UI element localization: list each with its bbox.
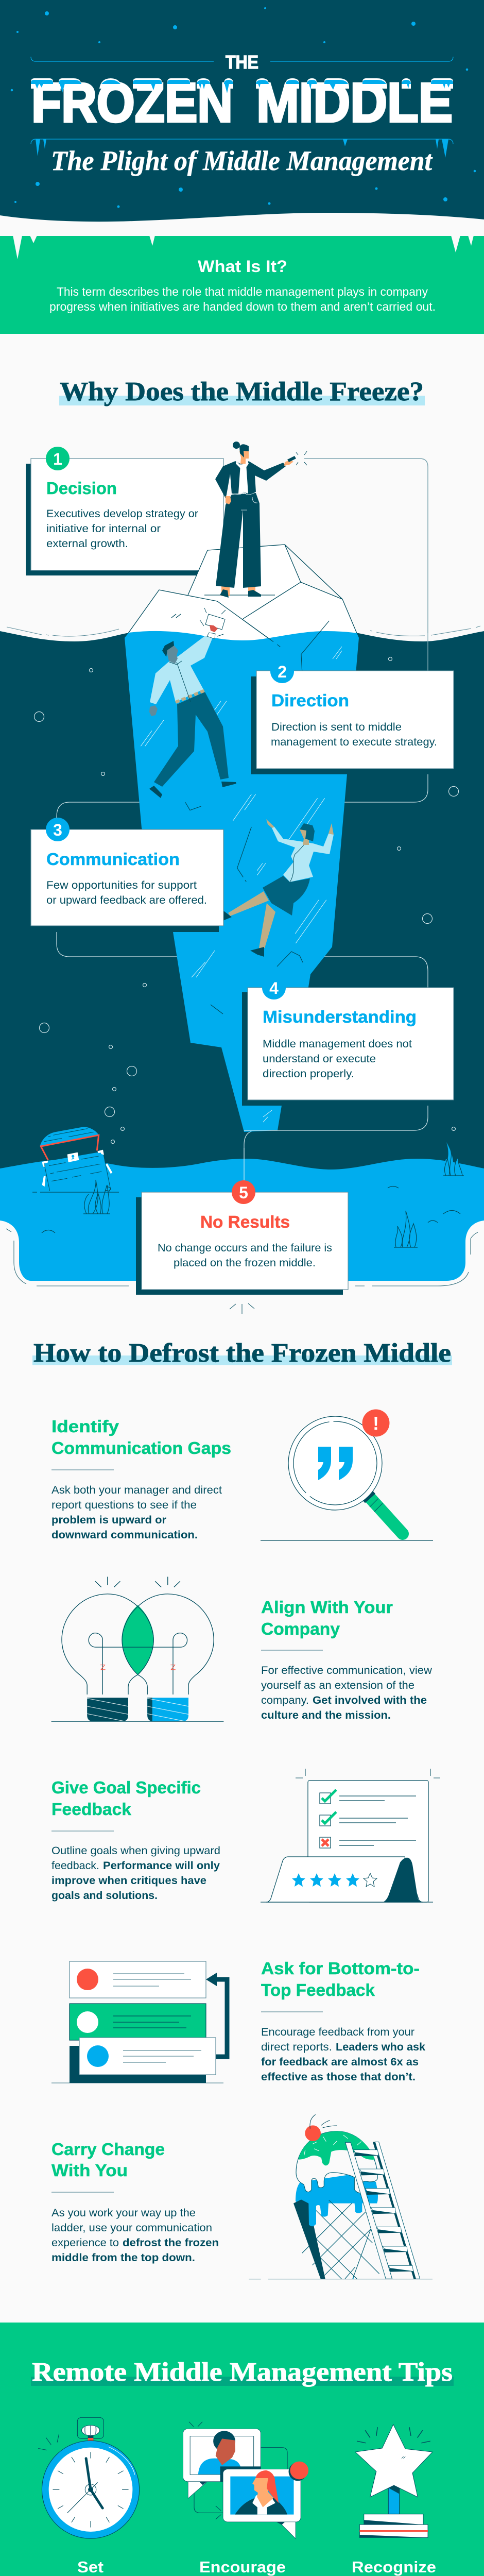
connector: decision to direction xyxy=(304,459,428,671)
tip: give goal specific feedback: Performance will only xyxy=(103,1860,220,1872)
tip: align with your company: Align With Your xyxy=(261,1598,393,1617)
card: communication: 3 xyxy=(53,821,62,839)
tip: carry change with you: As you work your way up the xyxy=(51,2207,196,2219)
card: no results: No Results xyxy=(200,1212,290,1231)
card: decision xyxy=(26,447,223,575)
title: subtitle: The Plight of Middle Management xyxy=(51,145,433,176)
tip: carry change with you: middle from the top down. xyxy=(51,2252,195,2264)
card: misunderstanding: 4 xyxy=(269,979,279,997)
heading: how to defrost: How to Defrost the Frozen Middle xyxy=(33,1338,451,1368)
tip: give goal specific feedback: improve when critiques have xyxy=(51,1875,206,1887)
tip: identify communication gaps: Ask both your manager and direct xyxy=(51,1484,222,1496)
tip: carry change with you: defrost the frozen xyxy=(123,2237,219,2249)
icon: stopwatch xyxy=(38,2417,140,2538)
tip: align with your company: yourself as an extension of the xyxy=(261,1680,414,1691)
text: recognize employees: Recognize xyxy=(352,2558,436,2576)
icon: star trophy xyxy=(355,2425,433,2537)
panel: what is it xyxy=(0,213,484,334)
tip: align with your company: culture and the mission. xyxy=(261,1709,391,1721)
underwater iceberg xyxy=(125,631,359,1132)
card: misunderstanding: Middle management does not xyxy=(263,1038,412,1050)
tip: align with your company: company. xyxy=(261,1694,309,1706)
card: decision: 1 xyxy=(53,450,62,468)
tip: align with your company: Get involved with the xyxy=(313,1694,427,1706)
card: decision: Executives develop strategy or xyxy=(46,508,198,520)
tip: align with your company: Company xyxy=(261,1619,340,1638)
panel: remote middle management tips xyxy=(0,2323,484,2576)
tip: ask for bottom-to-top feedback: direct reports. xyxy=(261,2041,332,2053)
tip: identify communication gaps: report questions to see if the xyxy=(51,1499,197,1511)
tip: identify communication gaps xyxy=(51,1417,231,1541)
card: direction: 2 xyxy=(278,663,287,681)
panel: iceberg scene xyxy=(0,442,484,1314)
card: misunderstanding: understand or execute xyxy=(263,1053,376,1065)
tip: carry change with you: experience to xyxy=(51,2237,119,2249)
connectors between cards xyxy=(57,774,428,1181)
icon: feedback checklist xyxy=(261,1769,440,1902)
card: direction xyxy=(251,659,454,774)
tip: ask for bottom-to-top feedback xyxy=(261,1959,425,2083)
heading: what is it: What Is It? xyxy=(198,257,287,276)
card: decision: external growth. xyxy=(46,538,128,550)
card: misunderstanding xyxy=(242,976,454,1106)
tip: ask for bottom-to-top feedback: Ask for Bottom-to- xyxy=(261,1959,420,1978)
tip: carry change with you: ladder, use your communication xyxy=(51,2222,212,2234)
bubbles xyxy=(34,657,458,1144)
tip: identify communication gaps: downward communication. xyxy=(51,1529,198,1541)
card: direction: Direction xyxy=(271,691,349,710)
text: definition: This term describes the role that middle management plays in company xyxy=(57,285,428,298)
text: set timed goals: Set xyxy=(77,2558,103,2576)
iceberg above water xyxy=(128,545,357,649)
tip: give goal specific feedback: Outline goals when giving upward xyxy=(51,1845,220,1857)
tip: give goal specific feedback: Give Goal Specific xyxy=(51,1778,201,1797)
title: frozen middle xyxy=(31,71,453,133)
tip: identify communication gaps: Identify xyxy=(51,1417,119,1436)
panel: header xyxy=(0,0,484,227)
tip: ask for bottom-to-top feedback: effective as those that don’t. xyxy=(261,2071,416,2083)
card: decision: initiative for internal or xyxy=(46,523,161,535)
heading: why does the middle freeze: Why Does the Middle Freeze? xyxy=(60,377,424,406)
figure: executive on iceberg xyxy=(204,442,307,598)
icon: feedback stack xyxy=(51,1961,227,2083)
card: no results: 5 xyxy=(239,1183,248,1202)
card: direction: management to execute strategy. xyxy=(271,736,437,748)
card: misunderstanding: direction properly. xyxy=(263,1068,354,1080)
shoreline lines xyxy=(6,1229,478,1286)
card: communication xyxy=(26,818,223,932)
icon: treasure chest xyxy=(40,1127,112,1191)
text: definition xyxy=(49,285,436,313)
card: misunderstanding: Misunderstanding xyxy=(263,1007,417,1026)
title: frozen middle: FROZEN xyxy=(31,71,233,133)
heading: remote tips: Remote Middle Management Tips xyxy=(32,2358,453,2387)
seaweed xyxy=(42,1142,464,1247)
icon: overlapping light bulbs xyxy=(51,1577,223,1721)
title: frozen middle: MIDDLE xyxy=(256,71,453,133)
tip: carry change with you: With You xyxy=(51,2161,128,2180)
tip: align with your company xyxy=(261,1598,433,1721)
tip: give goal specific feedback: feedback. xyxy=(51,1860,99,1872)
card: no results xyxy=(136,1180,348,1295)
icon: magnifying glass xyxy=(261,1410,433,1540)
card: no results: placed on the frozen middle. xyxy=(174,1257,316,1269)
sea floor xyxy=(0,1159,484,1281)
tip: give goal specific feedback: goals and solutions. xyxy=(51,1890,158,1902)
tip: ask for bottom-to-top feedback: Leaders who ask xyxy=(336,2041,425,2053)
icon: video chat xyxy=(183,2422,308,2538)
tip: identify communication gaps: problem is upward or xyxy=(51,1514,166,1526)
card: communication: Communication xyxy=(46,850,180,869)
tip: ask for bottom-to-top feedback: for feedback are almost 6x as xyxy=(261,2056,419,2068)
icon: ice cream and ladder xyxy=(249,2114,433,2279)
tip: ask for bottom-to-top feedback: Encourage feedback from your xyxy=(261,2026,414,2038)
card: decision: Decision xyxy=(46,479,117,498)
text: encourage communication: Encourage xyxy=(199,2558,286,2576)
card: no results: No change occurs and the failure is xyxy=(158,1242,332,1254)
text: definition: progress when initiatives are handed down to them and aren’t carried out. xyxy=(49,300,436,313)
figure: man falling xyxy=(149,608,236,798)
tip: ask for bottom-to-top feedback: Top Feedback xyxy=(261,1980,375,1999)
card: communication: Few opportunities for support xyxy=(46,879,197,891)
ice cracks and glints xyxy=(141,701,326,943)
tip: carry change with you xyxy=(51,2140,219,2264)
card: direction: Direction is sent to middle xyxy=(271,721,402,733)
tip: give goal specific feedback xyxy=(51,1778,220,1902)
tip: align with your company: For effective communication, view xyxy=(261,1665,433,1676)
tip: carry change with you: Carry Change xyxy=(51,2140,165,2159)
title: the: THE xyxy=(226,52,258,73)
tip: give goal specific feedback: Feedback xyxy=(51,1800,132,1819)
dark water xyxy=(0,631,484,1185)
icon: magnifying glass: ! xyxy=(373,1413,379,1434)
figure: woman falling xyxy=(223,819,334,957)
card: communication: or upward feedback are offered. xyxy=(46,894,207,906)
tip: identify communication gaps: Communication Gaps xyxy=(51,1438,231,1458)
